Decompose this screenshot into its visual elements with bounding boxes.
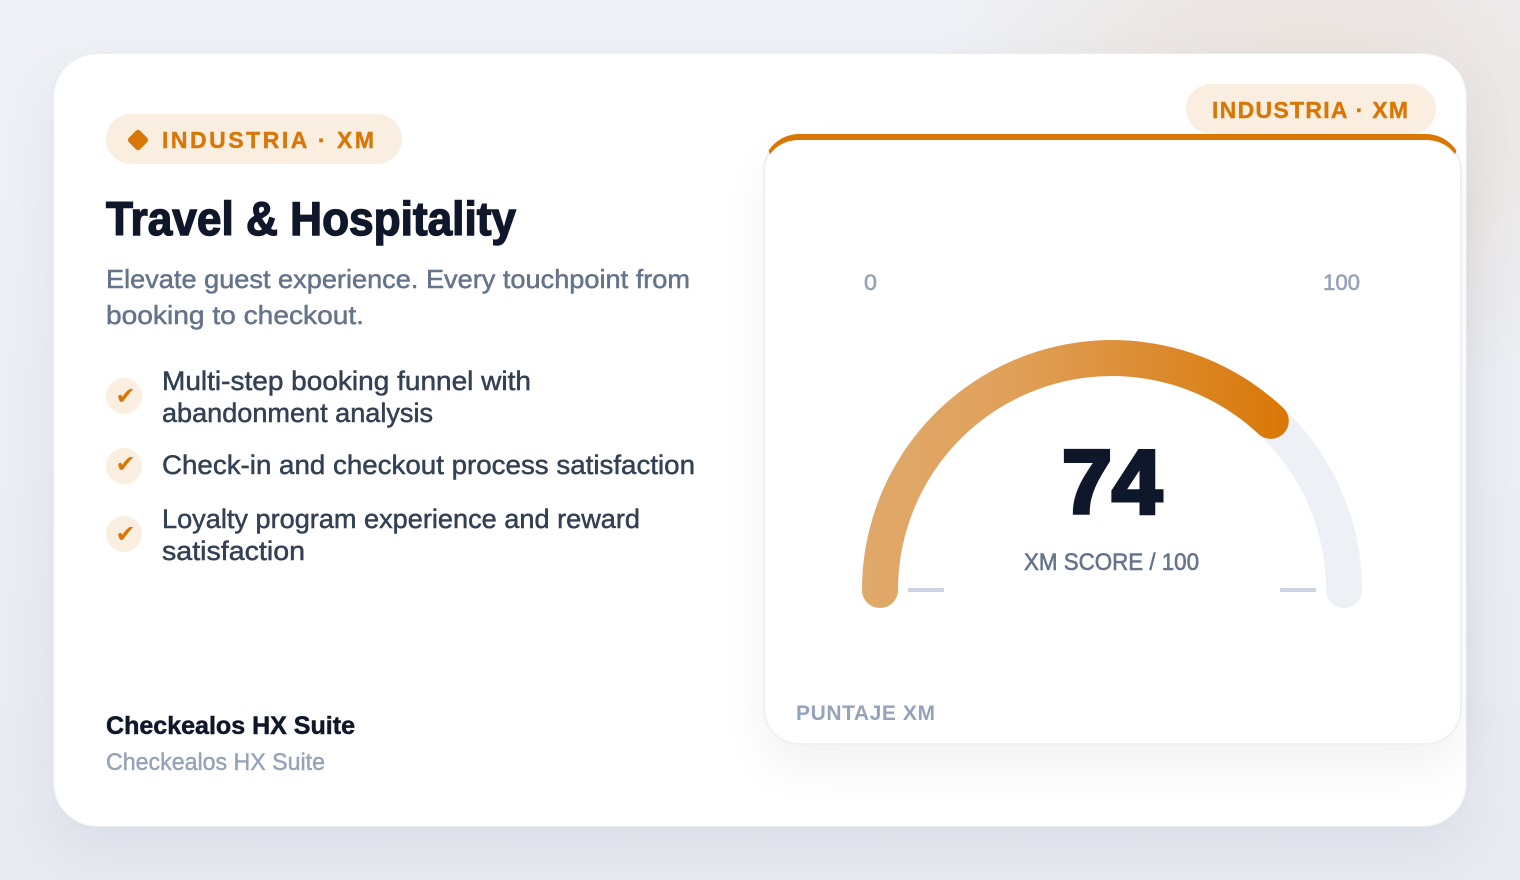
- badge: industria xm: INDUSTRIA · XM: [162, 127, 374, 153]
- badge: top right: INDUSTRIA · XM: [1212, 97, 1408, 123]
- scale labels: 0: [864, 270, 877, 295]
- feature item: loyalty: satisfaction: [162, 536, 305, 566]
- score value: 74: [1062, 433, 1162, 533]
- panel: score card: [763, 134, 1462, 745]
- gauge chart: [880, 358, 1344, 590]
- card label: PUNTAJE XM: [796, 702, 935, 725]
- gauge ticks: [908, 588, 1316, 592]
- title: Travel & Hospitality: [106, 192, 516, 245]
- feature item: booking funnel: Multi-step booking funnel with: [162, 366, 531, 396]
- feature item: booking funnel: ✔: [115, 382, 136, 410]
- footer brand: Checkealos HX Suite: [106, 712, 355, 740]
- feature item: loyalty: Loyalty program experience and reward: [162, 504, 640, 534]
- feature item: loyalty: ✔: [115, 520, 136, 548]
- footer brand: Checkealos HX Suite: [106, 749, 325, 776]
- scale labels: [864, 270, 1360, 295]
- footer brand: [106, 712, 355, 776]
- badge: top right: [1186, 84, 1436, 134]
- feature item: check-in: Check-in and checkout process satisfaction: [162, 450, 695, 480]
- feature item: check-in: ✔: [115, 450, 136, 478]
- feature item: loyalty: [106, 504, 640, 566]
- description: booking to checkout.: [106, 300, 364, 330]
- score caption: XM SCORE / 100: [1024, 549, 1199, 576]
- description: [106, 264, 690, 330]
- description: Elevate guest experience. Every touchpoint from: [106, 264, 690, 294]
- feature item: booking funnel: [106, 366, 531, 428]
- badge: industria xm: [106, 114, 402, 164]
- feature item: booking funnel: abandonment analysis: [162, 398, 433, 428]
- scale labels: 100: [1323, 270, 1360, 295]
